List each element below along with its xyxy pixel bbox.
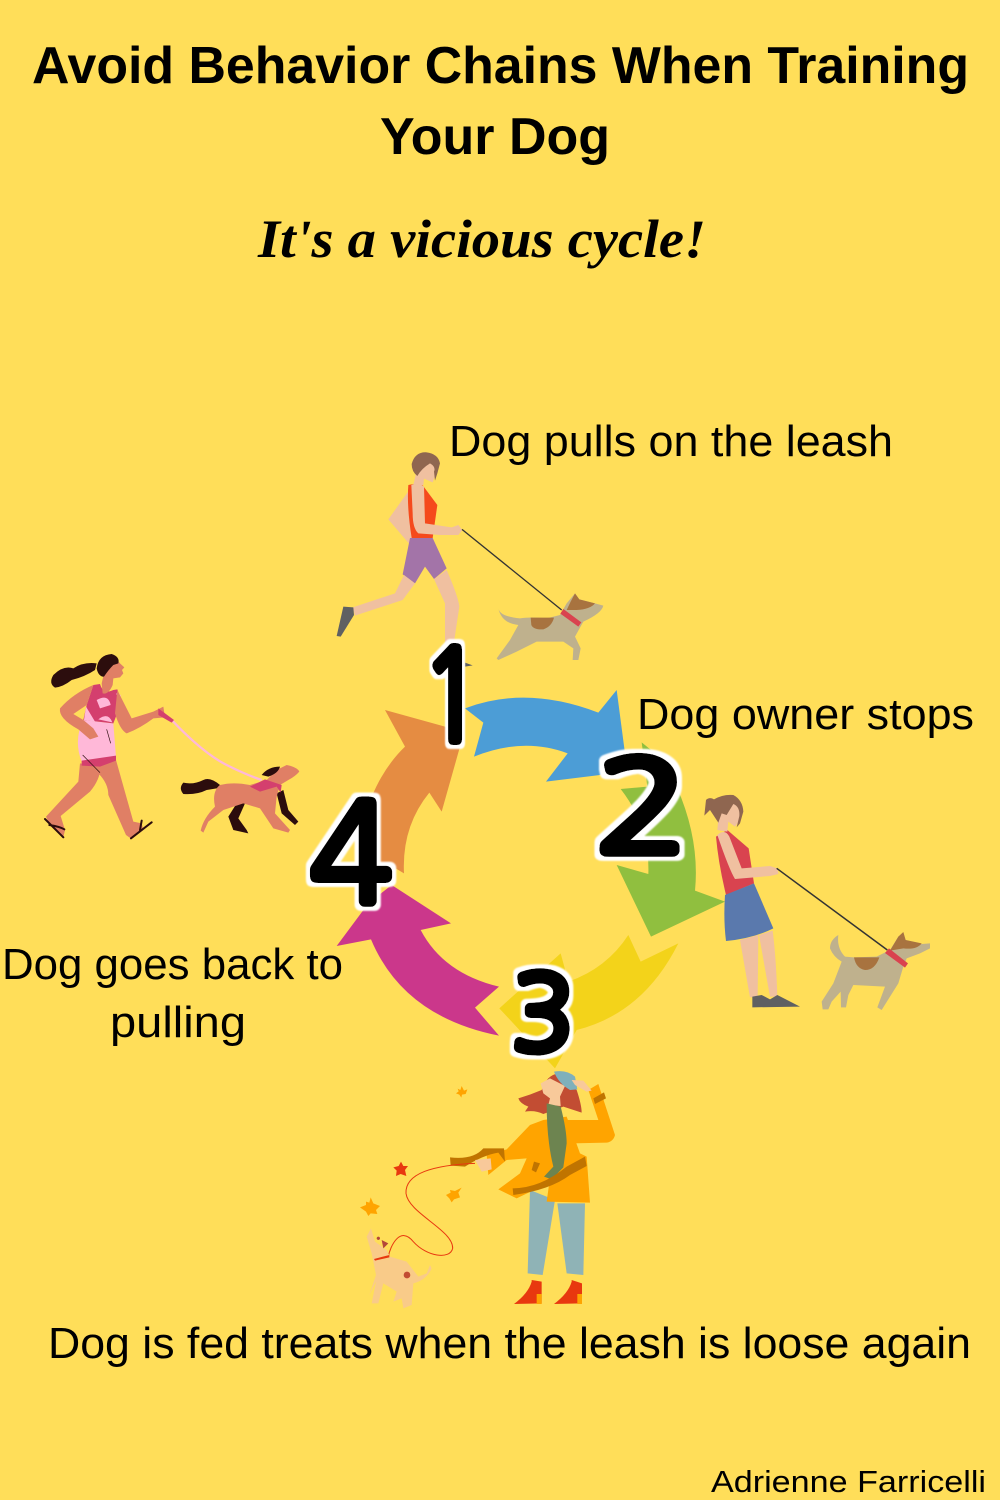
label: step 2: Dog owner stops: [637, 690, 974, 739]
figure: woman with autumn coat and dog, step 3: [360, 1071, 615, 1308]
figure: woman stopped with dog, step 2: [704, 795, 930, 1010]
arrow: step 3 to 4: [337, 885, 499, 1036]
label: step 4: pulling: [110, 998, 246, 1047]
title: Avoid Behavior Chains When Training: [32, 37, 969, 95]
arrow: blue: [465, 690, 625, 782]
label: step 4: Dog goes back to: [2, 940, 343, 989]
label: step 3: Dog is fed treats when the leash is loose again: [48, 1319, 971, 1368]
title: [32, 37, 969, 166]
arrow: step 2 to 3: [499, 935, 678, 1068]
number 4: 4: [310, 786, 392, 922]
label: step 4: [2, 940, 343, 1047]
arrow: step 4 to 1: [355, 710, 460, 878]
figure: runner with dog: [337, 452, 603, 667]
number 1: 1: [422, 635, 482, 759]
arrow: step 1 to 2: [617, 742, 725, 937]
author credit: Adrienne Farricelli: [711, 1464, 986, 1499]
title: Your Dog: [380, 108, 610, 166]
label: step 1: Dog pulls on the leash: [449, 417, 893, 466]
figure: woman walking dog, step 4: [45, 654, 299, 839]
number 2: 2: [595, 745, 689, 871]
subtitle: It's a vicious cycle!: [257, 209, 706, 269]
cycle arrows: [337, 690, 725, 1068]
number 3: 3: [512, 962, 574, 1065]
